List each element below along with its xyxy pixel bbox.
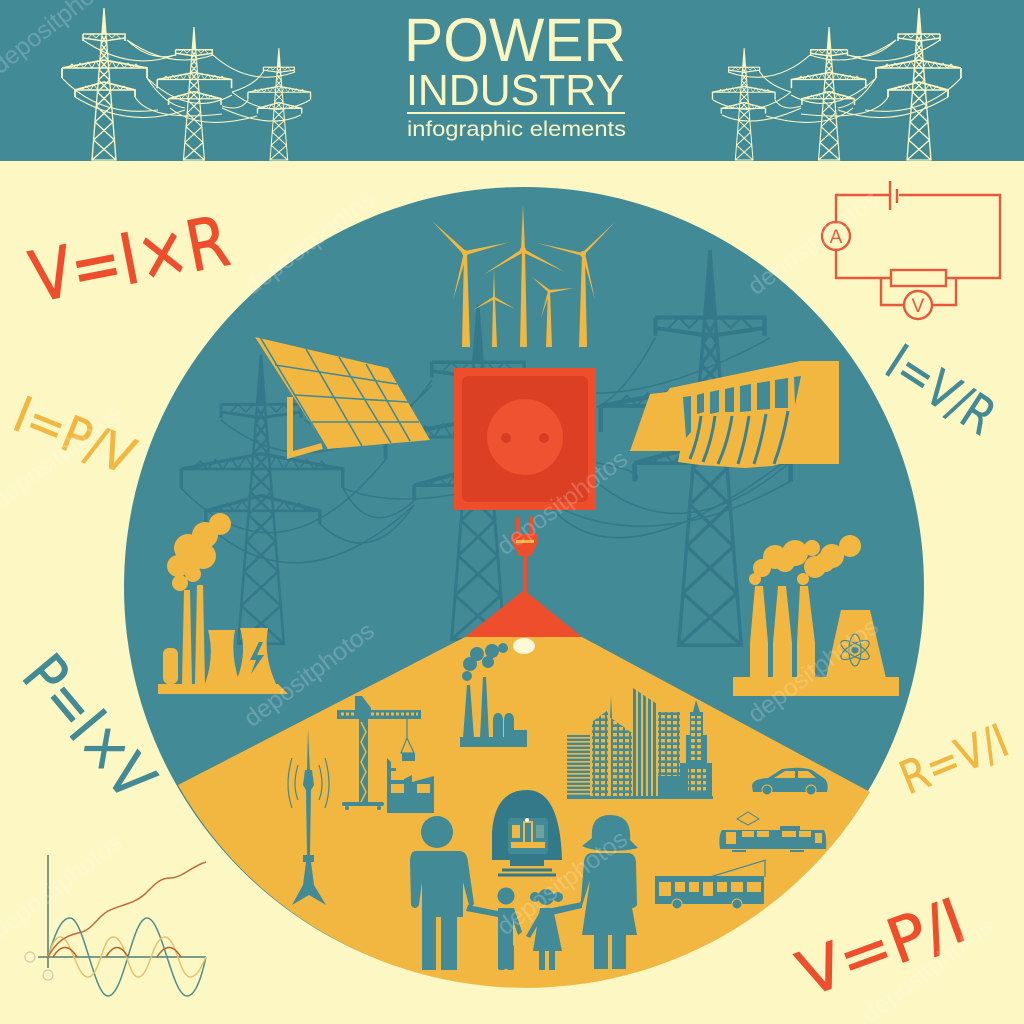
red triangle (465, 590, 582, 637)
watermarks: depositphotos (492, 825, 633, 941)
factory (460, 643, 527, 747)
circuit diagram: V (912, 296, 925, 317)
solar panel (255, 337, 430, 455)
main circle (124, 187, 924, 987)
coal power plant (158, 513, 288, 694)
boy (498, 888, 522, 970)
turbine 3 (473, 270, 515, 347)
plug and cord (512, 517, 538, 592)
power lines (181, 338, 822, 563)
train in tunnel (492, 790, 562, 875)
watermarks: depositphotos (239, 617, 380, 733)
mother (580, 815, 638, 969)
title (404, 6, 626, 141)
watermarks: depositphotos (239, 185, 380, 301)
trolleybus (655, 860, 766, 909)
waveform chart (25, 855, 206, 996)
lamp glow (513, 638, 535, 654)
father (410, 816, 498, 970)
circuit diagram (822, 181, 1000, 319)
watermarks: depositphotos (743, 613, 884, 729)
formula: I=P/V: I=P/V (6, 385, 143, 486)
smoke (749, 535, 861, 585)
girl (526, 889, 582, 970)
consumer icons (288, 643, 828, 970)
title line 2: INDUSTRY (406, 66, 624, 115)
left pylons (62, 8, 311, 160)
yellow sector: consumers (178, 637, 870, 988)
header band (0, 0, 1024, 161)
socket (454, 368, 596, 510)
wind turbines (432, 205, 615, 347)
watermarks: depositphotos (743, 185, 884, 301)
car (752, 768, 828, 795)
right pylon (601, 250, 822, 645)
formula: I=V/R: I=V/R (875, 333, 1006, 446)
left pylon (181, 355, 343, 644)
city skyline (567, 688, 713, 799)
background pylons and power lines (181, 250, 822, 645)
TV tower (288, 728, 329, 905)
circuit diagram: A (830, 227, 843, 248)
turbine 1 (432, 221, 510, 347)
hydro dam (630, 361, 839, 468)
atom symbol (838, 634, 872, 666)
title line 1: POWER (404, 6, 626, 74)
family (410, 815, 638, 970)
centre pylon (386, 305, 573, 639)
axis labels (25, 952, 53, 980)
formula: P=I×V: P=I×V (9, 642, 168, 813)
smoke (167, 513, 231, 591)
construction crane (337, 696, 421, 810)
broken building (387, 758, 434, 813)
subtitle: infographic elements (407, 118, 626, 141)
formula: V=P/I: V=P/I (788, 884, 975, 1011)
title rule (407, 112, 625, 114)
turbine 5 (532, 277, 574, 347)
nuclear power plant (733, 535, 899, 696)
turbine 4 (537, 222, 615, 347)
turbine 2 (483, 205, 565, 347)
right pylons (712, 8, 961, 160)
watermarks: depositphotos (492, 445, 633, 561)
tram (719, 812, 826, 852)
formula: V=I×R: V=I×R (24, 200, 236, 319)
